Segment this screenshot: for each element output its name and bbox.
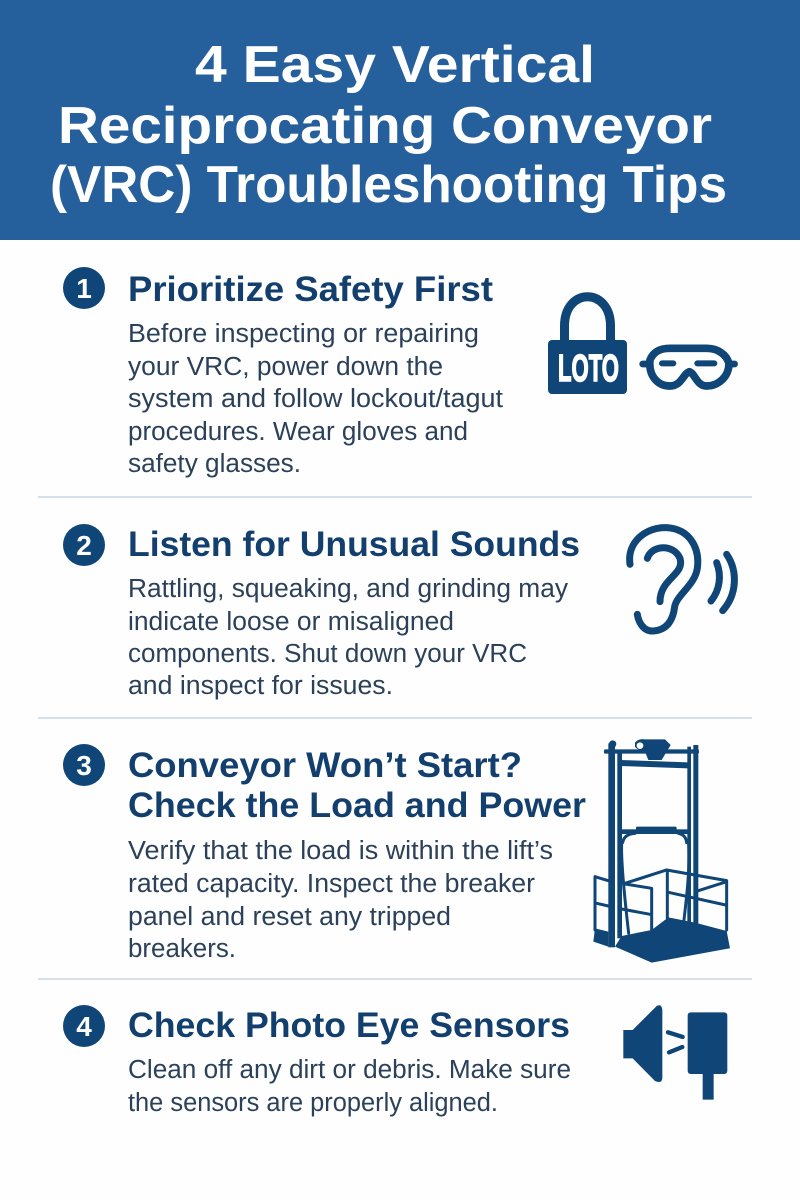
number badge 1: 1 — [76, 273, 92, 304]
body text: tip 3 — [128, 837, 553, 963]
header banner — [0, 0, 800, 240]
body text: tip 2 — [128, 575, 568, 700]
body text: tip 2: components. Shut down your VRC — [128, 640, 527, 668]
number badge 2: 2 — [76, 530, 92, 561]
number badge 2 — [63, 524, 105, 566]
body text: tip 2: Rattling, squeaking, and grinding may — [128, 575, 568, 603]
body text: tip 4: Clean off any dirt or debris. Make sure — [128, 1056, 571, 1084]
body text: tip 3: Verify that the load is within the lift’s — [128, 837, 553, 865]
title — [50, 36, 727, 214]
number badge 1 — [63, 267, 105, 309]
body text: tip 1: your VRC, power down the — [128, 353, 443, 381]
body text: tip 3: breakers. — [128, 935, 236, 963]
icon: ear with sound waves — [630, 528, 734, 631]
panel: tip 4 — [63, 1005, 727, 1117]
number badge 4: 4 — [76, 1011, 92, 1042]
icon: vertical lift — [593, 739, 730, 963]
title: (VRC) Troubleshooting Tips — [50, 156, 727, 214]
body text: tip 1 — [128, 320, 503, 478]
body text: tip 1: procedures. Wear gloves and — [128, 418, 468, 446]
body text: tip 3: rated capacity. Inspect the breaker — [128, 870, 536, 898]
title: Reciprocating Conveyor — [58, 97, 712, 155]
body text: tip 3: panel and reset any tripped — [128, 903, 451, 931]
number badge 3: 3 — [76, 750, 92, 781]
body text: tip 1: system and follow lockout/tagut — [128, 385, 503, 413]
body text: tip 4 — [128, 1056, 571, 1117]
number badge 3 — [63, 744, 105, 786]
panel: tip 1 — [63, 267, 735, 478]
icon: safety goggles — [643, 348, 735, 386]
heading: tip 1: Prioritize Safety First — [128, 270, 493, 309]
panel: tip 3 — [63, 739, 730, 963]
heading: tip 3: Check the Load and Power — [128, 786, 586, 825]
icon: LOTO padlock: LOTO — [558, 348, 619, 390]
title: 4 Easy Vertical — [195, 36, 595, 94]
icon: LOTO padlock — [548, 297, 627, 394]
panel: tip 2 — [63, 524, 734, 700]
heading: tip 3: Conveyor Won’t Start? — [128, 746, 522, 785]
body text: tip 1: Before inspecting or repairing — [128, 320, 479, 348]
body text: tip 2: indicate loose or misaligned — [128, 608, 454, 636]
body text: tip 2: and inspect for issues. — [128, 672, 393, 700]
body text: tip 4: the sensors are properly aligned. — [128, 1089, 498, 1117]
heading: tip 4: Check Photo Eye Sensors — [128, 1006, 570, 1045]
number badge 4 — [63, 1005, 105, 1047]
icon: photo eye sensor — [623, 1005, 727, 1100]
heading: tip 3 — [128, 746, 586, 825]
body text: tip 1: safety glasses. — [128, 450, 301, 478]
heading: tip 2: Listen for Unusual Sounds — [128, 525, 580, 564]
